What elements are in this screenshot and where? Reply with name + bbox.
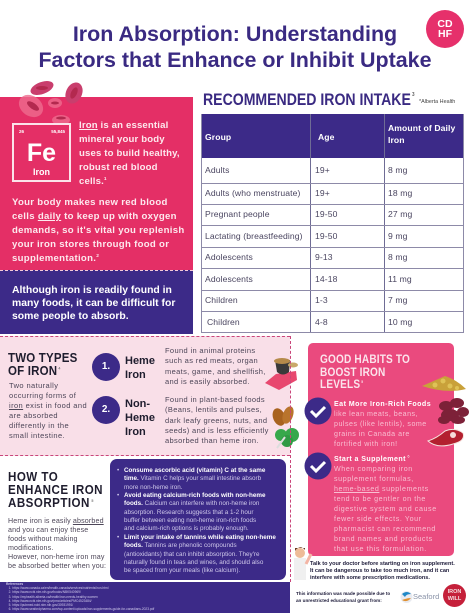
table: recommended iron intake: 18 mg [388,188,412,198]
panel: references: References [6,582,23,586]
text: start a supplement: that use this formulation. [334,545,427,553]
text: enhance description [8,517,106,570]
text: start a supplement: fewer side effects. Your [334,515,422,523]
text: iron definition: mineral your body [79,134,165,145]
table: recommended iron intake: Adolescents [205,252,253,262]
text: start a supplement: heme-based supplements [334,485,429,493]
table: recommended iron intake: Group [205,132,231,142]
text: two types description: occurring forms of [9,391,76,400]
list: enhance tips: absorption. Research suggests that a 1-2 hour [124,509,254,516]
text: daily red blood cells: your iron stores through food or [12,239,169,250]
title [38,22,432,72]
list: enhance tips: • [117,492,119,499]
table: recommended iron intake: 19-50 [315,209,337,219]
list: enhance tips: and calcium-rich options is probably enough. [124,525,249,532]
table: recommended iron intake: 19+ [315,165,330,175]
heading: good habits: LEVELS 5 [320,377,363,391]
text: start a supplement [334,455,437,553]
panel: references: 1. https://www.canada.ca/en/health-canada/services/nutrients/iron.html [9,586,108,590]
badge: 2 [92,396,120,424]
text: enhance description: Heme iron is easily absorbed [8,517,104,525]
panel: references: 3. https://myhealth.alberta.ca/health/iron-needs-healthy-women [9,595,98,599]
heading: recommended iron intake: RECOMMENDED IRON INTAKE 3 [203,91,414,109]
icon: Fe periodic element [12,123,71,182]
table: recommended iron intake: 11 mg [388,274,412,284]
list: enhance tips: foods. Calcium can interfere with non-heme iron [124,500,259,507]
table: recommended iron intake: Children [207,317,240,327]
text: two types description: iron exist in food and [9,401,87,410]
logo: Iron Will: IRON [448,589,461,595]
heading: heme iron [125,355,155,381]
heading: two types of iron: TWO TYPES [8,350,77,365]
text: enhance description: However, non-heme iron may [8,553,105,561]
table: recommended iron intake: 7 mg [388,295,408,305]
text: start a supplement: digestive system and cause [334,505,437,513]
table: recommended iron intake: 1-3 [315,295,328,305]
badge: 1: 1. [102,361,110,372]
text: heme description: such as red meats, organ [165,356,258,365]
text: enhance description: modifications. [8,544,53,552]
list: enhance tips: more non-heme iron. [124,484,182,491]
table: recommended iron intake: 19-50 [315,231,337,241]
table: recommended iron intake: 14-18 [315,274,337,284]
logo: Iron Will [443,584,466,607]
table: recommended iron intake: 9 mg [388,231,408,241]
dashed vertical divider [290,336,291,582]
text: eat more iron-rich foods: pulses (like lentils), some [334,420,427,428]
panel: references [0,582,290,613]
table: recommended iron intake: Adults [205,165,230,175]
icon: kidney beans [438,398,469,424]
list: enhance tips [117,467,276,574]
text: talk to your doctor: interfere with some prescription medications. [310,575,430,581]
text: iron definition: robust red blood [79,162,158,173]
list: enhance tips: Consume ascorbic acid (vitamin) C at the same [124,467,265,474]
text: eat more iron-rich foods [334,400,431,448]
text: grant acknowledgement [296,591,390,603]
icon: Fe periodic element: 55,845 [51,129,65,134]
note: source: *Alberta Health [419,99,455,105]
heading: two types of iron [8,350,77,378]
heading: heme iron: Iron [125,369,146,381]
text: heme description [165,346,266,386]
icon: check 1 [304,398,332,424]
list: enhance tips: time. Vitamin C helps your small intestine absorb [124,475,261,482]
text: start a supplement: supplement formulas, [334,475,414,483]
list: enhance tips: naturally found in teas and wines, and should also [124,559,263,566]
list: enhance tips: (antioxidants) that can inhibit absorption. They're [124,551,260,558]
badge: 1 [92,353,120,381]
panel: good habits [308,343,454,556]
text: talk to your doctor: It can be dangerous to take too much iron, and it can [310,568,449,574]
icon: legumes [422,376,466,391]
text: two types description: small intestine. [9,431,65,440]
logo: Seaford: Seaford [413,592,439,601]
text: eat more iron-rich foods: grains in Canada are [334,430,410,438]
icon: doctor [294,547,312,580]
icon: Fe periodic element: Fe [27,139,56,167]
text: daily red blood cells: cells daily to keep up with oxygen [12,211,177,222]
text: eat more iron-rich foods: like lean meats, beans, [334,410,418,418]
panel: absorption note: some people to absorb. [12,311,129,322]
icon: Fe periodic element: Iron [33,167,50,177]
heading: non-heme iron: Iron [125,426,146,438]
text: daily red blood cells [12,197,184,264]
text: start a supplement: tend to be gentler on the [334,495,426,503]
icon: Fe periodic element: 26 [19,129,24,134]
logo: Seaford [400,591,439,603]
table: recommended iron intake: Adults (who menstruate) [205,188,300,198]
text: start a supplement: When comparing iron [334,465,413,473]
text: iron definition: uses to build healthy, [79,148,180,159]
heading: heme iron: Heme [125,355,155,367]
table: recommended iron intake: 4-8 [315,317,328,327]
heading: how to enhance iron absorption: HOW TO [8,470,58,484]
heading: how to enhance iron absorption: ABSORPTION 5 [8,496,94,510]
text: heme description: meats, game, and shellfish, [165,367,266,376]
text: talk to your doctor: Talk to your doctor before starting on iron supplement. [310,561,455,567]
text: two types description [9,381,87,440]
icon: meat and bowl [265,358,298,390]
panel: iron intro [0,97,193,270]
table: recommended iron intake: 19+ [315,188,330,198]
text: iron definition: cells.1 [79,176,107,187]
panel: absorption note: Although iron is readily found in [12,285,172,296]
title: Factors that Enhance or Inhibit Uptake [38,48,432,72]
text: talk to your doctor [310,561,455,581]
logo: CDHF [426,10,464,48]
text: eat more iron-rich foods: fortified with iron! [334,440,398,448]
text: non-heme description: Found in plant-based foods [165,395,265,404]
heading: good habits: GOOD HABITS TO [320,352,410,366]
list: enhance tips: buffer between eating non-heme iron-rich foods [124,517,256,524]
heading: how to enhance iron absorption: ENHANCE IRON [8,483,103,497]
list: enhance tips: Limit your intake of tannins while eating non-heme [124,534,276,541]
list: enhance tips: • [117,467,119,474]
panel: references: 5. https://pubmed.ncbi.nlm.nih.gov/30931991/ [9,603,73,607]
logo: CDHF: HF [438,28,452,40]
text: iron definition [79,120,180,187]
text: daily red blood cells: Your body makes new red blood [12,197,168,208]
table: recommended iron intake: 8 mg [388,165,408,175]
panel: absorption note: many foods, it can be difficult for [12,298,175,309]
icon: red blood cells [19,81,83,123]
text: start a supplement: pharmacist can recommend [334,525,436,533]
panel: enhance tips [110,459,286,580]
text: heme description: Found in animal proteins [165,346,256,355]
text: enhance description: be absorbed better when you: [8,562,106,570]
table: recommended iron intake: Lactating (breastfeeding) [205,231,303,241]
table: recommended iron intake: 27 mg [388,209,412,219]
heading: good habits [320,352,410,391]
panel: references: 2. https://www.ncbi.nlm.nih.gov/books/NBK540969/ [9,590,81,594]
text: grant acknowledgement: an unrestricted educational grant from: [296,598,382,603]
table: recommended iron intake: Adolescents [205,274,253,284]
table: recommended iron intake: 9-13 [315,252,333,262]
heading: non-heme iron: Non- [125,398,150,410]
icon: steak [427,428,464,446]
list: enhance tips: • [117,534,119,541]
panel: references: 6. https://www.seafordpharma.com/wp-content/uploads/iron-supplements-guide-for-canadians-2023.pdf [9,607,154,611]
list: enhance tips: foods. Tannins are phenolic compounds [124,542,237,549]
text: iron definition: Iron is an essential [79,120,168,131]
title: Iron Absorption: Understanding [73,22,397,46]
text: two types description: differently in the [9,421,69,430]
text: enhance description: foods without making [8,535,78,543]
text: heme description: and is easily absorbed. [165,377,250,386]
text: eat more iron-rich foods: Eat More Iron-Rich Foods [334,400,431,408]
text: start a supplement: Start a Supplement 6 [334,455,410,463]
text: daily red blood cells: supplementation.2 [12,253,99,264]
table: recommended iron intake: 10 mg [388,317,412,327]
table: recommended iron intake: Pregnant people [205,209,270,219]
table: recommended iron intake: Children [205,295,238,305]
text: non-heme description [165,395,269,445]
text: two types description: are absorbed [9,411,58,420]
heading: non-heme iron [125,398,155,438]
logo: CDHF: CD [437,18,453,30]
text: two types description: Two naturally [9,381,58,390]
heading: non-heme iron: Heme [125,412,155,424]
list: enhance tips: Avoid eating calcium-rich foods with non-heme [124,492,265,499]
text: non-heme description: (Beans, lentils and pulses, [165,405,262,414]
icon: check 2 [304,452,332,480]
table: recommended iron intake: Age [318,132,335,142]
table: recommended iron intake [201,114,464,333]
text: daily red blood cells: demands, so it's vital you replenish [12,225,184,236]
panel: absorption note [0,270,193,334]
text: non-heme description: dark leafy greens, nuts, and [165,416,267,425]
table: recommended iron intake: Iron [388,135,405,145]
list: enhance tips: be spaced from your meals (like calcium). [124,567,240,574]
text: enhance description: and you can enjoy these [8,526,88,534]
text: non-heme description: absorbed than heme iron. [165,436,259,445]
panel: references: 4. https://www.ncbi.nlm.nih.gov/pmc/articles/PMC4523484/ [9,599,92,603]
text: non-heme description: seeds) and is less efficiently [165,426,269,435]
heading: two types of iron: OF IRON 4 [8,363,61,378]
heading: how to enhance iron absorption [8,470,103,510]
panel: two types of iron [0,336,290,456]
logo: Iron Will: WILL [448,596,461,602]
table: recommended iron intake: Amount of Daily [388,123,455,133]
table: recommended iron intake: 8 mg [388,252,408,262]
text: start a supplement: brand names and products [334,535,433,543]
icon: almonds and greens [272,406,299,448]
text: grant acknowledgement: This information was made possible due to [296,591,390,596]
heading: good habits: BOOST IRON [320,365,386,379]
badge: 2: 2. [102,404,110,415]
